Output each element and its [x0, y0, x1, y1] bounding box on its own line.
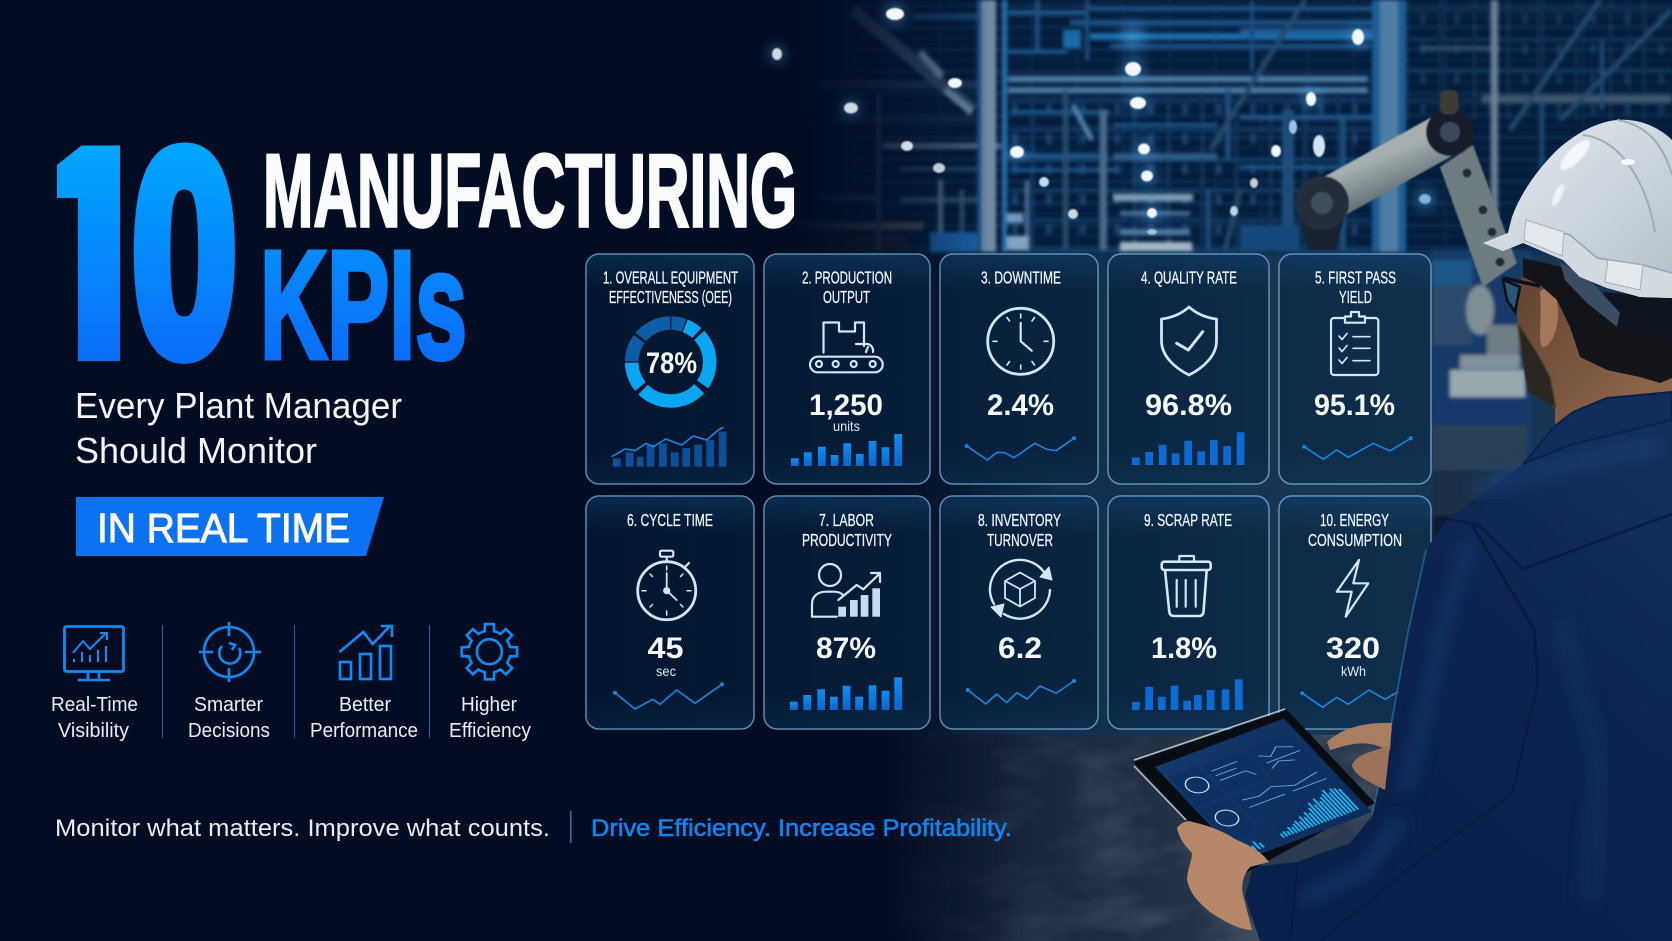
- card 10: energy consumption: [1279, 496, 1431, 729]
- worker face and neck: [1517, 262, 1672, 428]
- card 5: first pass yield: 95.1%: [1314, 389, 1395, 422]
- card 7: labor productivity: 87%: [816, 632, 876, 665]
- trend line: [966, 679, 1076, 704]
- card 8: inventory turnover: 8. INVENTORY: [978, 510, 1061, 530]
- card 1: OEE: [586, 254, 754, 484]
- bar chart with trend line: [612, 427, 726, 467]
- jacket body: [1245, 392, 1672, 941]
- benefit: smarter decisions: [188, 622, 270, 742]
- title number: 10: 0: [132, 91, 238, 415]
- benefit: real-time visibility: [51, 626, 138, 742]
- card 9: scrap rate: 1.8%: [1151, 632, 1217, 665]
- card 2: production output: 2. PRODUCTION: [802, 268, 892, 288]
- card 8: inventory turnover: [940, 496, 1098, 729]
- bar chart: [790, 677, 902, 710]
- benefit: higher efficiency: Efficiency: [449, 720, 531, 742]
- benefit: smarter decisions: Decisions: [188, 720, 270, 742]
- card 2: production output: OUTPUT: [823, 287, 870, 307]
- card 5: first pass yield: YIELD: [1339, 287, 1372, 307]
- benefit: smarter decisions: Smarter: [194, 694, 263, 716]
- icon: conveyor: [810, 322, 883, 372]
- trend line: [965, 436, 1076, 460]
- trend line: [613, 682, 724, 709]
- card 10: energy consumption: 10. ENERGY: [1320, 510, 1389, 530]
- icon: clipboard: [1331, 312, 1378, 375]
- jacket seams and highlights: [1290, 392, 1672, 941]
- icon: person with growth chart: [812, 564, 880, 617]
- card 9: scrap rate: [1108, 496, 1269, 729]
- subtitle: Should Monitor: [75, 430, 317, 471]
- card 10: energy consumption: 320: [1326, 632, 1380, 665]
- card 7: labor productivity: PRODUCTIVITY: [802, 530, 892, 550]
- icon: rising bars: [340, 625, 392, 679]
- bar chart: [1132, 679, 1243, 710]
- lower hand: [1177, 821, 1269, 930]
- icon: target: [199, 622, 261, 682]
- left fade into navy: [790, 0, 1020, 735]
- card 6: cycle time: 6. CYCLE TIME: [627, 510, 713, 530]
- benefit: real-time visibility: Visibility: [58, 720, 129, 742]
- background: factory scene: [770, 0, 1672, 941]
- icon: shield: [1162, 307, 1216, 375]
- badge: in real time: [76, 497, 384, 556]
- title number: 10: [57, 142, 235, 364]
- card 1: OEE: EFFECTIVENESS (OEE): [609, 287, 732, 307]
- card 7: labor productivity: [764, 496, 930, 729]
- title: MANUFACTURING: MANUFACTURING: [263, 134, 797, 250]
- machine to the right of the cards: [1432, 250, 1532, 450]
- card 6: cycle time: [586, 496, 754, 729]
- bar chart: [1132, 432, 1244, 465]
- bar chart: [791, 434, 902, 466]
- worker with hard hat: [1133, 120, 1672, 941]
- card 8: inventory turnover: 6.2: [998, 632, 1042, 665]
- card 10: energy consumption: CONSUMPTION: [1308, 530, 1402, 550]
- benefit: better performance: Performance: [310, 720, 418, 742]
- tablet screen: [1155, 718, 1372, 860]
- title number: 10: 1: [14, 91, 164, 415]
- tablet: [1133, 709, 1375, 876]
- card 3: downtime: 3. DOWNTIME: [981, 268, 1061, 288]
- tagline: [55, 811, 1012, 843]
- card 1: OEE: 1. OVERALL EQUIPMENT: [603, 268, 738, 288]
- card 3: downtime: [940, 254, 1098, 484]
- card 2: production output: [764, 254, 930, 484]
- card 7: labor productivity: 7. LABOR: [819, 510, 874, 530]
- card 2: production output: 1,250: [809, 389, 883, 422]
- helmet strap: [1560, 262, 1672, 340]
- card 2: production output: units: [833, 418, 860, 434]
- card 1: OEE: 78%: [646, 347, 697, 380]
- tagline: Drive Efficiency. Increase Profitability.: [591, 815, 1012, 842]
- factory floor: [916, 735, 1384, 941]
- benefit: higher efficiency: Higher: [461, 694, 517, 716]
- trend line: [1302, 436, 1413, 459]
- title: KPIs: KPIs: [260, 219, 467, 391]
- card 5: first pass yield: 5. FIRST PASS: [1315, 268, 1396, 288]
- benefit: real-time visibility: Real-Time: [51, 694, 138, 716]
- donut gauge: [632, 323, 710, 401]
- worker glasses: [1503, 278, 1540, 312]
- card 9: scrap rate: 9. SCRAP RATE: [1144, 510, 1232, 530]
- card 4: quality rate: 4. QUALITY RATE: [1141, 268, 1237, 288]
- benefit: better performance: Better: [339, 694, 391, 716]
- worker hair: [1523, 258, 1672, 383]
- card 4: quality rate: [1108, 254, 1269, 484]
- card 3: downtime: 2.4%: [987, 389, 1054, 422]
- ceiling lights: [770, 5, 1434, 235]
- robot arm: [1295, 90, 1517, 287]
- trend line: [1300, 690, 1398, 707]
- subtitle: [75, 385, 402, 471]
- benefits row: [51, 622, 531, 742]
- card 5: first pass yield: [1279, 254, 1431, 484]
- machinery behind the cards: [820, 250, 1672, 735]
- blue haze of the upper hall: [790, 0, 1672, 255]
- icon: box with circular arrows: [990, 560, 1052, 619]
- benefit: better performance: [310, 625, 418, 742]
- subtitle: Every Plant Manager: [75, 385, 402, 426]
- icon: monitor: [64, 626, 124, 680]
- icon: lightning bolt: [1337, 560, 1368, 617]
- card 6: cycle time: sec: [656, 663, 676, 679]
- tagline: Monitor what matters. Improve what counts.: [55, 815, 550, 842]
- card 6: cycle time: 45: [648, 632, 684, 665]
- upper hand: [1327, 723, 1392, 790]
- badge: in real time: IN REAL TIME: [97, 505, 350, 551]
- hard hat: [1483, 120, 1672, 298]
- icon: clock: [988, 308, 1054, 374]
- card 8: inventory turnover: TURNOVER: [987, 530, 1053, 550]
- icon: gear: [462, 624, 517, 679]
- card 10: energy consumption: kWh: [1341, 663, 1366, 679]
- icon: stopwatch: [638, 551, 696, 620]
- card 4: quality rate: 96.8%: [1145, 389, 1232, 422]
- benefit: higher efficiency: [449, 624, 531, 742]
- icon: trash bin: [1162, 556, 1211, 616]
- blurred steel structure: [797, 0, 1672, 585]
